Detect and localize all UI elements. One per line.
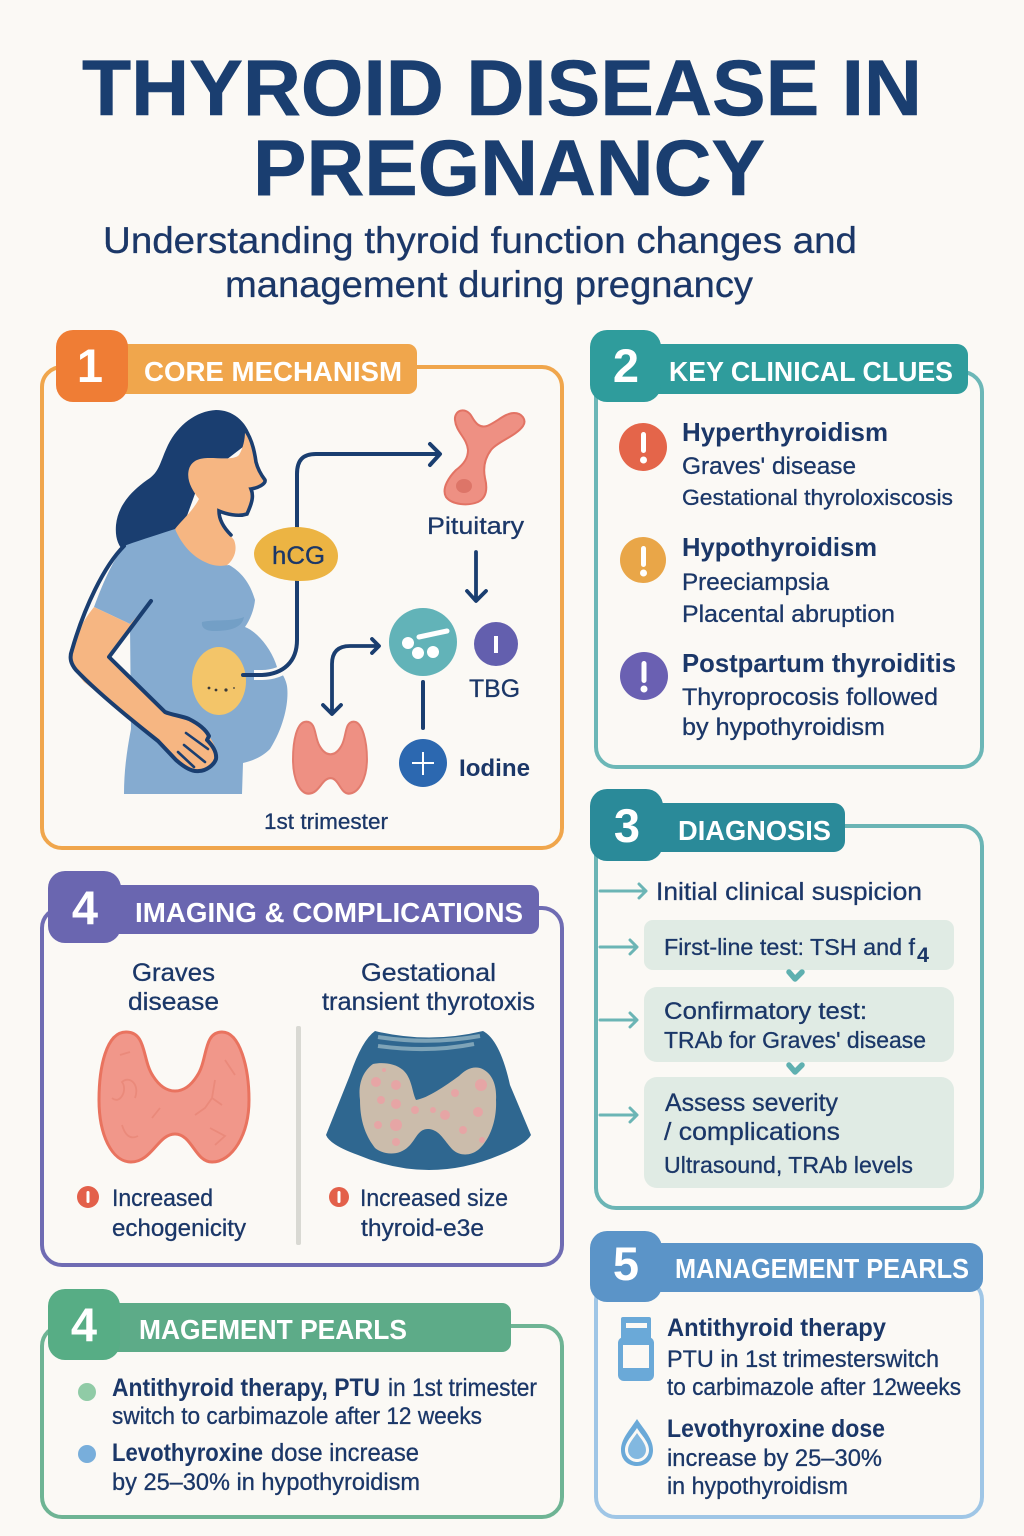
clue: postpartum thyroiditis: Postpartum thyroiditis xyxy=(682,648,956,678)
clue: postpartum thyroiditis xyxy=(620,648,956,741)
chevron xyxy=(789,1065,802,1072)
finding: gestational xyxy=(329,1185,508,1242)
subtitle xyxy=(103,220,857,305)
header bar: core mechanism xyxy=(56,330,417,402)
arrows: flow steps xyxy=(600,884,646,1122)
title: THYROID DISEASE IN xyxy=(82,43,922,132)
heading: gestational transient thyrotoxis: Gestational xyxy=(361,959,496,987)
pearl: antithyroid therapy: switch to carbimazole after 12 weeks xyxy=(112,1403,482,1430)
clue: postpartum thyroiditis: by hypothyroidism xyxy=(682,714,885,741)
label: iodine: Iodine xyxy=(459,755,530,782)
header bar: diagnosis xyxy=(590,789,845,861)
clue: hypothyroidism: Placental abruption xyxy=(682,601,895,628)
header bar: key clinical clues xyxy=(590,330,968,402)
icon: pill bottle xyxy=(618,1317,654,1381)
finding: Graves: Increased xyxy=(112,1185,213,1212)
icon: thyroid large xyxy=(99,1032,249,1162)
header bar: key clinical clues: 2 xyxy=(613,339,639,392)
clue: hyperthyroidism: Hyperthyroidism xyxy=(682,417,888,447)
pearl: levothyroxine: Levothyroxine xyxy=(112,1439,263,1467)
subtitle: management during pregnancy xyxy=(225,264,754,305)
pearl: levothyroxine xyxy=(78,1439,420,1496)
header bar: diagnosis: 3 xyxy=(614,799,640,852)
finding: Graves xyxy=(77,1185,246,1242)
header bar: management pearls: MANAGEMENT PEARLS xyxy=(675,1253,969,1284)
heading: Graves disease: Graves xyxy=(132,959,215,987)
header bar: key clinical clues: KEY CLINICAL CLUES xyxy=(669,356,953,387)
connector: hormone to iodine xyxy=(421,682,425,728)
pearl: antithyroid therapy: to carbimazole after 12weeks xyxy=(667,1374,961,1401)
header bar: management pearls xyxy=(590,1231,983,1302)
pearl: antithyroid therapy: Antithyroid therapy xyxy=(667,1314,886,1342)
step: assess severity: Assess severity xyxy=(665,1089,838,1117)
finding: gestational: thyroid-e3e xyxy=(361,1215,484,1242)
clue: hyperthyroidism xyxy=(619,417,953,510)
step: assess severity: / complications xyxy=(664,1118,840,1146)
step: first-line test: First-line test: TSH and f xyxy=(664,934,916,960)
hCG label: hCG xyxy=(272,542,325,570)
step: first-line test: 4 xyxy=(917,944,929,967)
step: confirmatory test xyxy=(644,987,954,1062)
header bar: magement pearls: 4 xyxy=(71,1298,97,1351)
clue: hyperthyroidism: Gestational thyroloxiscosis xyxy=(682,485,953,510)
header bar: magement pearls: MAGEMENT PEARLS xyxy=(139,1314,407,1345)
panel: management pearls xyxy=(590,1231,983,1517)
step: confirmatory test: TRAb for Graves' disease xyxy=(664,1027,926,1053)
icon: thyroid small xyxy=(293,722,367,794)
pearl: antithyroid therapy xyxy=(78,1374,537,1430)
heading: gestational transient thyrotoxis xyxy=(322,959,535,1016)
panel: magement pearls xyxy=(42,1289,562,1517)
pearl: levothyroxine: increase by 25–30% xyxy=(667,1445,882,1472)
finding: Graves: echogenicity xyxy=(112,1215,246,1242)
pearl: levothyroxine xyxy=(667,1415,885,1500)
pearl: antithyroid therapy: in 1st trimester xyxy=(388,1374,537,1402)
label: TBG: TBG xyxy=(469,675,520,703)
arrow: pituitary to hormone xyxy=(467,552,486,601)
heading: gestational transient thyrotoxis: transient thyrotoxis xyxy=(322,988,535,1016)
pearl: levothyroxine: by 25–30% in hypothyroidism xyxy=(112,1469,420,1496)
icon: pituitary xyxy=(445,410,524,504)
clue: postpartum thyroiditis: Thyroprocosis followed xyxy=(682,684,938,711)
panel: key clinical clues xyxy=(590,330,982,767)
header bar: management pearls: 5 xyxy=(613,1237,639,1290)
panel: imaging and complications xyxy=(42,871,562,1265)
step: assess severity: Ultrasound, TRAb levels xyxy=(664,1152,913,1178)
icon: hormone circle xyxy=(389,608,457,676)
header bar: imaging and complications: IMAGING & COMPLICATIONS xyxy=(135,897,523,928)
title: PREGNANCY xyxy=(253,123,765,212)
header bar: diagnosis: DIAGNOSIS xyxy=(678,815,831,846)
arrow: hormone and thyroid xyxy=(323,639,379,714)
heading: Graves disease xyxy=(128,959,219,1016)
divider xyxy=(296,1026,301,1245)
pearl: levothyroxine: Levothyroxine dose xyxy=(667,1415,885,1443)
illustration: pregnant woman xyxy=(70,410,292,794)
heading: Graves disease: disease xyxy=(128,988,219,1016)
icon: TBG xyxy=(474,622,518,666)
panel: diagnosis xyxy=(590,789,982,1208)
hCG label xyxy=(254,527,338,581)
label: pituitary: Pituitary xyxy=(427,513,524,540)
clue: hypothyroidism: Hypothyroidism xyxy=(682,532,877,562)
image: ultrasound xyxy=(326,1031,531,1170)
label: 1st trimester: 1st trimester xyxy=(264,809,388,834)
chevron xyxy=(789,972,802,979)
subtitle: Understanding thyroid function changes and xyxy=(103,220,857,261)
pearl: levothyroxine: in hypothyroidism xyxy=(667,1473,848,1500)
icon: water drop xyxy=(621,1419,653,1466)
header bar: imaging and complications: 4 xyxy=(72,881,98,934)
step: confirmatory test: Confirmatory test: xyxy=(664,998,867,1025)
pearl: levothyroxine: dose increase xyxy=(271,1439,419,1467)
panel: core mechanism xyxy=(42,330,562,848)
title xyxy=(82,43,922,212)
header bar: imaging and complications xyxy=(48,871,539,943)
header bar: core mechanism: 1 xyxy=(77,339,103,392)
clue: hypothyroidism: Preeciampsia xyxy=(682,569,830,596)
pearl: antithyroid therapy xyxy=(667,1314,961,1401)
arrow: hCG to pituitary xyxy=(243,444,440,675)
header bar: core mechanism: CORE MECHANISM xyxy=(144,356,402,387)
clue: hyperthyroidism: Graves' disease xyxy=(682,453,856,480)
step: initial suspicion: Initial clinical suspicion xyxy=(656,878,922,906)
finding: gestational: Increased size xyxy=(360,1185,508,1212)
pearl: antithyroid therapy: Antithyroid therapy, PTU xyxy=(112,1374,380,1402)
icon: iodine xyxy=(399,739,447,787)
step: first-line test xyxy=(644,920,954,970)
pearl: antithyroid therapy: PTU in 1st trimesterswitch xyxy=(667,1346,939,1373)
header bar: magement pearls xyxy=(48,1289,511,1360)
clue: hypothyroidism xyxy=(620,532,895,628)
step: assess severity xyxy=(644,1077,954,1188)
